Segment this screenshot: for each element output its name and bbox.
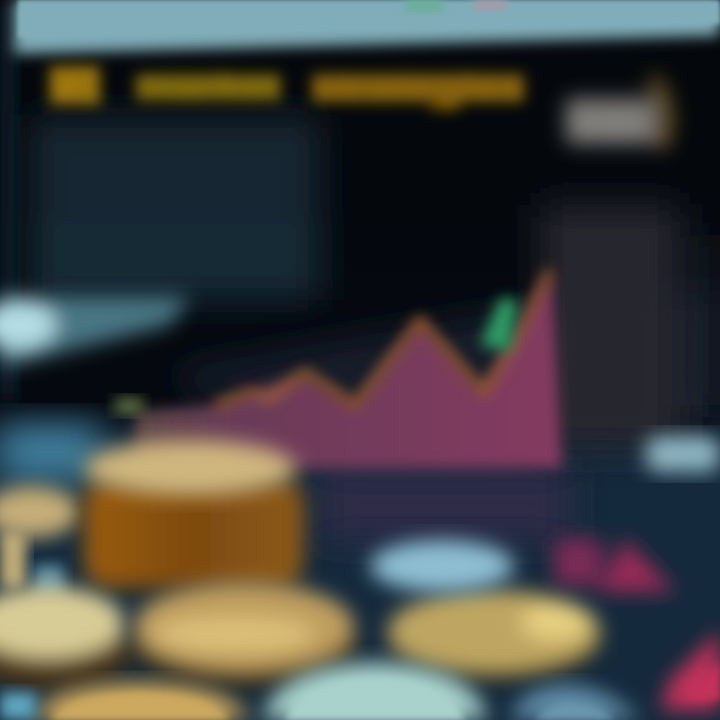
logo: white label with gold arc: logo — [566, 105, 654, 141]
coins — [0, 440, 640, 720]
title — [48, 58, 526, 114]
red chart marks — [554, 538, 676, 592]
coin: bottom silver — [262, 662, 488, 720]
area chart — [115, 270, 562, 470]
coin: bottom right pale blue — [510, 684, 640, 720]
coin: lower left — [0, 586, 132, 688]
coin: stacked amber cup — [84, 440, 304, 588]
coin: far left — [0, 486, 80, 538]
logo: white label with gold arc — [566, 78, 666, 148]
coin: centre — [132, 582, 356, 685]
title: market — [134, 67, 282, 109]
coin: bottom gold — [30, 682, 250, 720]
price table column — [540, 205, 720, 450]
coin: bottom-left blue reflection — [0, 692, 36, 720]
red corner shape — [660, 630, 720, 710]
title: M1 — [48, 58, 102, 114]
left laptop highlight — [0, 296, 190, 368]
right price tag — [646, 436, 720, 472]
coin: right gold — [388, 590, 600, 680]
monitor bezel strip — [14, 0, 720, 54]
coin: blue silver top — [370, 540, 514, 592]
title: strategies — [310, 67, 526, 109]
